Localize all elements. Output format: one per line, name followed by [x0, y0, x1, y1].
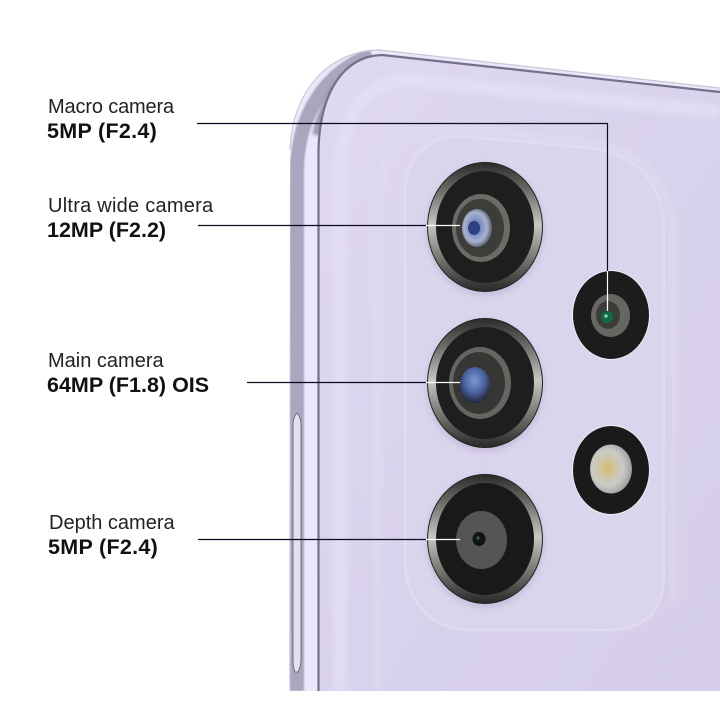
callout: depth camera [48, 512, 460, 559]
callout: ultra wide camera [47, 195, 460, 242]
lens: macro camera [572, 270, 650, 360]
back panel [319, 55, 720, 691]
callout: depth camera: 5MP (F2.4) [48, 535, 158, 559]
lens: ultra wide camera [426, 162, 544, 296]
side button [293, 413, 301, 672]
callout: main camera: Main camera [48, 350, 164, 372]
callout: main camera [47, 350, 460, 397]
callout: macro camera: Macro camera [48, 96, 175, 118]
lens: main camera [426, 318, 544, 452]
callout: ultra wide camera: Ultra wide camera [48, 195, 214, 217]
callout: macro camera: 5MP (F2.4) [47, 119, 157, 143]
camera island [405, 136, 664, 630]
callout: main camera: 64MP (F1.8) OIS [47, 373, 209, 397]
callout: depth camera: Depth camera [49, 512, 175, 534]
phone frame [289, 50, 720, 691]
callout: ultra wide camera: 12MP (F2.2) [47, 218, 166, 242]
callout: macro camera [47, 96, 608, 311]
lens: depth camera [426, 474, 544, 608]
phone body [289, 50, 720, 691]
flash [572, 425, 650, 515]
